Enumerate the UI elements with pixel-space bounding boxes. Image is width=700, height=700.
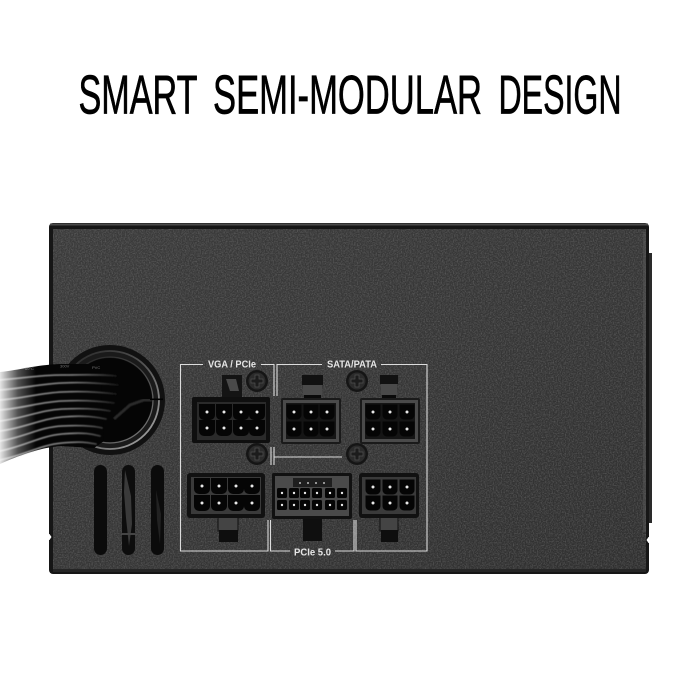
- title: SEMI-MODULAR: [213, 64, 482, 126]
- cable bundle: PVC: [92, 365, 100, 370]
- cable bundle: [0, 360, 118, 468]
- cable bundle: 300V: [60, 364, 70, 368]
- power supply rear panel: [0, 223, 652, 574]
- cable bundle: 60°C: [25, 366, 34, 371]
- connector: bottom right 6-pin: [359, 473, 419, 542]
- connector: SATA/PATA right 6-pin: [360, 375, 420, 444]
- label: VGA / PCIe: VGA / PCIe: [208, 358, 256, 370]
- connector: VGA / PCIe 8-pin: [192, 375, 270, 443]
- edge notches: [47, 534, 651, 543]
- connector: bottom left 8-pin: [187, 473, 265, 542]
- connector group bracket lines: [180, 364, 427, 551]
- screws: [246, 370, 368, 465]
- label: SATA/PATA: SATA/PATA: [327, 358, 377, 370]
- ventilation slots: [94, 465, 164, 555]
- label: PCIe 5.0: PCIe 5.0: [294, 546, 331, 558]
- right side strip: [649, 253, 652, 523]
- title: SMART: [78, 64, 198, 126]
- cable grommet: [55, 345, 165, 455]
- connector: SATA/PATA left 6-pin: [281, 375, 341, 444]
- connector: PCIe 5.0 12-pin: [272, 473, 352, 541]
